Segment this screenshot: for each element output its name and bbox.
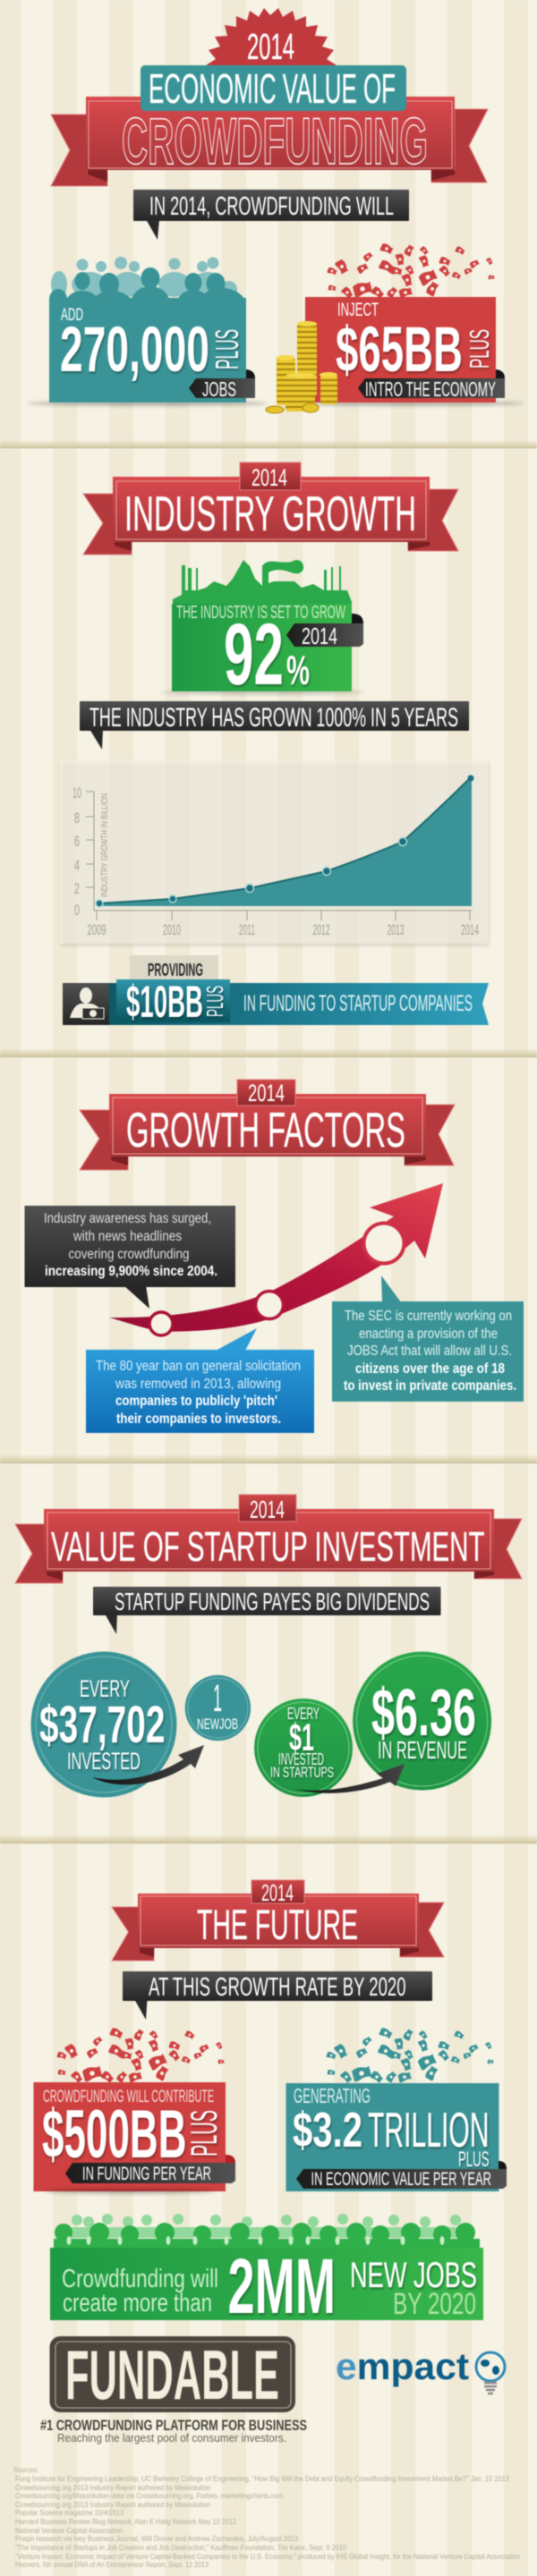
callout: SEC jobs act: enacting a provision of the <box>359 1326 498 1342</box>
ribbon: into the economy <box>358 369 505 401</box>
speech bubble: startup funding <box>93 1587 440 1634</box>
heading ribbon: the future: THE FUTURE <box>197 1901 358 1948</box>
panel: 2MM new jobs by 2020: create more than <box>63 2289 212 2318</box>
sources: Preqin research via Ivey Business Journal, Will Drover and Andrew Zacharakis, July/August 2013 <box>15 2535 298 2543</box>
icon: light bulb globe <box>476 2352 505 2394</box>
panel: inject $65BB plus: PLUS <box>464 329 495 369</box>
panel: add 270,000 plus jobs: PLUS <box>209 329 245 369</box>
icon: crowd silhouette <box>49 257 246 326</box>
sources: National Venture Capital Association <box>15 2527 123 2535</box>
callout: industry awareness: with news headlines <box>72 1229 182 1244</box>
ribbon: in funding per year <box>65 2155 235 2184</box>
section: value of startup investment <box>15 1495 522 1798</box>
circle: every $1 invested: INVESTED <box>278 1750 324 1768</box>
logo: fundable: #1 CROWDFUNDING PLATFORM FOR BUSINESS <box>40 2417 307 2434</box>
sources: Popular Science magazine 10/4/2013 <box>15 2509 124 2517</box>
panel: 92% industry set to grow <box>159 560 365 703</box>
circle: 1 new job: NEWJOB <box>197 1716 238 1733</box>
heading ribbon: industry growth <box>83 462 458 555</box>
icon: green factory skyline <box>173 560 352 608</box>
icon: flying money teal <box>326 2027 493 2084</box>
chart: industry growth in billion: INDUSTRY GROWTH IN BILLION <box>100 793 110 897</box>
arrow: dollar to revenue <box>294 1764 405 1793</box>
circle: $6.36 in revenue <box>353 1651 491 1791</box>
chart: industry growth in billion: 2009 <box>88 921 106 938</box>
logo: fundable <box>40 2335 307 2445</box>
icon: flying money red <box>56 2027 224 2084</box>
sources: Sources: <box>13 2466 38 2474</box>
badge: 2014 starburst <box>206 8 337 67</box>
panel: $500BB plus in funding per year: $500BB <box>42 2097 186 2173</box>
callout: SEC jobs act: JOBS Act that will allow all U.S. <box>347 1343 512 1359</box>
circle: every $37,702 invested: EVERY <box>80 1675 130 1702</box>
badge: 2014 starburst: 2014 <box>247 26 294 67</box>
ribbon: 2014: 2014 <box>302 623 337 649</box>
section: the future <box>34 1879 507 2330</box>
chart axes and labels <box>86 792 472 920</box>
circle: 1 new job: 1 <box>213 1677 222 1720</box>
circle: every $37,702 invested: $37,702 <box>39 1696 165 1754</box>
panel: $3.2 trillion plus: PLUS <box>458 2148 489 2172</box>
section: industry growth <box>60 462 489 1027</box>
banner: providing $10BB plus in funding: $10BB <box>126 977 203 1027</box>
sources <box>13 2466 520 2569</box>
panel: add 270,000 plus jobs: ADD <box>61 306 83 325</box>
panel: $500BB plus in funding per year: PLUS <box>183 2110 225 2157</box>
chart: industry growth in billion: 10 <box>72 784 81 801</box>
sources: Fung Institute for Engineering Leadership, UC Berkeley College of Engineering, "How Big Will the Debt and Equity Crowdfunding Investment Market Be?" Jan. 15 2013 <box>15 2475 510 2483</box>
arrow: rising growth curve <box>109 1183 443 1335</box>
logo: empact <box>336 2345 505 2394</box>
panel: $500BB plus in funding per year <box>34 2027 235 2193</box>
panel: 92% industry set to grow: THE INDUSTRY IS SET TO GROW <box>176 603 345 623</box>
sources: Harvard Business Review Blog Network, Alan E Hallg Network May 10 2012 <box>15 2518 237 2526</box>
logo: empact: empact <box>336 2345 469 2387</box>
chart: industry growth in billion: 8 <box>74 809 80 826</box>
callout: SEC jobs act: The SEC is currently working on <box>345 1309 512 1324</box>
circle: $6.36 in revenue: IN REVENUE <box>378 1736 467 1764</box>
panel: 2MM new jobs by 2020: NEW JOBS <box>350 2256 477 2295</box>
circle: every $1 invested: EVERY <box>287 1705 320 1723</box>
chart: industry growth in billion: 2 <box>74 880 80 897</box>
panel: inject $65BB plus: INJECT <box>337 300 379 320</box>
panel: 2MM new jobs by 2020 <box>50 2214 483 2330</box>
panel: $3.2 trillion plus: $3.2 <box>293 2102 362 2157</box>
speech bubble: industry has grown 1000% <box>80 701 469 750</box>
ribbon: in funding per year: IN FUNDING PER YEAR <box>82 2164 211 2184</box>
panel: inject $65BB plus: $65BB <box>336 315 463 386</box>
panel: 92% industry set to grow: % <box>286 647 310 693</box>
chart: industry growth in billion: 2014 <box>461 921 479 938</box>
panel: 92% industry set to grow: 92 <box>224 606 284 703</box>
callout: industry awareness: Industry awareness has surged, <box>44 1211 211 1226</box>
circle: $6.36 in revenue: $6.36 <box>371 1675 476 1750</box>
banner: providing $10BB plus in funding: PROVIDING <box>148 961 203 980</box>
circle: every $1 invested: IN STARTUPS <box>270 1764 334 1781</box>
panel: inject $65BB plus <box>300 242 524 406</box>
speech bubble: in 2014 crowdfunding will: IN 2014, CROWDFUNDING WILL <box>149 192 394 221</box>
heading ribbon: the future <box>112 1879 444 1961</box>
ribbon: in economic value per year <box>296 2161 507 2190</box>
main title ribbon <box>51 97 488 186</box>
callout: industry awareness <box>25 1206 235 1309</box>
panel: add 270,000 plus jobs: 270,000 <box>60 315 209 386</box>
sources: Crowdsourcing.org/Massolution data via Crowdsourcing.org, Forbes, marketingcharts.com <box>15 2492 284 2500</box>
panel: $3.2 trillion plus: GENERATING <box>294 2084 371 2107</box>
icon: gold coin stacks <box>266 321 337 413</box>
ribbon: 2014 <box>286 614 363 649</box>
circle: every $1 invested: $1 <box>289 1716 314 1759</box>
chart: industry growth in billion: 4 <box>74 857 80 874</box>
circle: every $37,702 invested: INVESTED <box>67 1748 141 1775</box>
callout: industry awareness: increasing 9,900% since 2004. <box>45 1264 217 1279</box>
heading ribbon: growth factors <box>80 1080 455 1170</box>
area series <box>96 775 474 907</box>
speech bubble: at this growth rate <box>123 1971 432 2020</box>
section: growth factors <box>25 1080 524 1433</box>
circle: every $37,702 invested <box>30 1651 177 1798</box>
callout: 80 year ban: The 80 year ban on general solicitation <box>96 1359 301 1374</box>
callout: 80 year ban: companies to publicly 'pitch' <box>115 1394 277 1409</box>
heading ribbon: value of startup investment <box>15 1495 522 1583</box>
icon: flying money <box>327 242 494 300</box>
circle: every $1 invested <box>254 1699 353 1797</box>
circle: 1 new job <box>185 1675 251 1741</box>
heading ribbon: the future: 2014 <box>261 1879 294 1906</box>
section: economic value of crowdfunding <box>27 8 524 413</box>
callout: SEC jobs act: citizens over the age of 18 <box>355 1361 505 1377</box>
heading ribbon: industry growth: 2014 <box>251 464 287 491</box>
panel: $3.2 trillion plus <box>286 2027 507 2191</box>
speech bubble: in 2014 crowdfunding will <box>133 190 409 240</box>
panel: 2MM new jobs by 2020: Crowdfunding will <box>62 2265 218 2293</box>
panel: 2MM new jobs by 2020: 2MM <box>227 2243 336 2330</box>
chart: industry growth in billion: 0 <box>74 902 80 919</box>
icon: investor with money <box>70 987 104 1019</box>
icon: green crowd silhouette <box>54 2214 480 2251</box>
chart: industry growth in billion: 2011 <box>239 921 255 938</box>
banner: providing $10BB plus in funding <box>63 955 489 1027</box>
callout: 80 year ban <box>86 1328 314 1433</box>
sources: Crowdsourcing.org 2013 Industry Report authored by Massolution <box>15 2501 210 2509</box>
callout: 80 year ban: was removed in 2013, allowing <box>115 1377 281 1392</box>
logo: fundable: Reaching the largest pool of consumer investors. <box>57 2432 286 2445</box>
callout: industry awareness: covering crowdfunding <box>68 1247 190 1262</box>
sources: "The Importance of Startups in Job Creation and Job Destruction," Kauffman Foundation, Tim Kane, Sept. 9 2010 <box>15 2544 347 2552</box>
chart: industry growth in billion: 2010 <box>163 921 181 938</box>
panel: $500BB plus in funding per year: CROWDFUNDING WILL CONTRIBUTE <box>43 2088 214 2106</box>
chart: industry growth in billion: 6 <box>74 833 80 850</box>
ribbon: jobs <box>189 369 255 401</box>
chart: industry growth in billion: 2013 <box>387 921 405 938</box>
logo: fundable: FUNDABLE <box>65 2335 279 2414</box>
panel: add 270,000 plus jobs <box>27 257 268 406</box>
banner: providing $10BB plus in funding: PLUS <box>201 986 228 1017</box>
panel: 2MM new jobs by 2020: BY 2020 <box>393 2287 476 2321</box>
ribbon: jobs: JOBS <box>202 377 236 401</box>
arrow: investment to job <box>92 1745 204 1784</box>
sources: Hoovers, 5th annual DNA of An Entrepreneur Report, Sept. 12 2013 <box>15 2561 209 2569</box>
title: economic value of <box>141 65 406 112</box>
chart: industry growth in billion <box>60 760 488 944</box>
heading ribbon: value of startup investment: 2014 <box>250 1496 285 1523</box>
heading ribbon: growth factors: 2014 <box>248 1080 285 1106</box>
chart: industry growth in billion: 2012 <box>313 921 329 938</box>
callout: 80 year ban: their companies to investors. <box>116 1411 281 1427</box>
sources: Crowdsourcing.org 2013 Industry Report authored by Massolution <box>15 2484 210 2492</box>
callout: SEC jobs act <box>332 1275 524 1402</box>
